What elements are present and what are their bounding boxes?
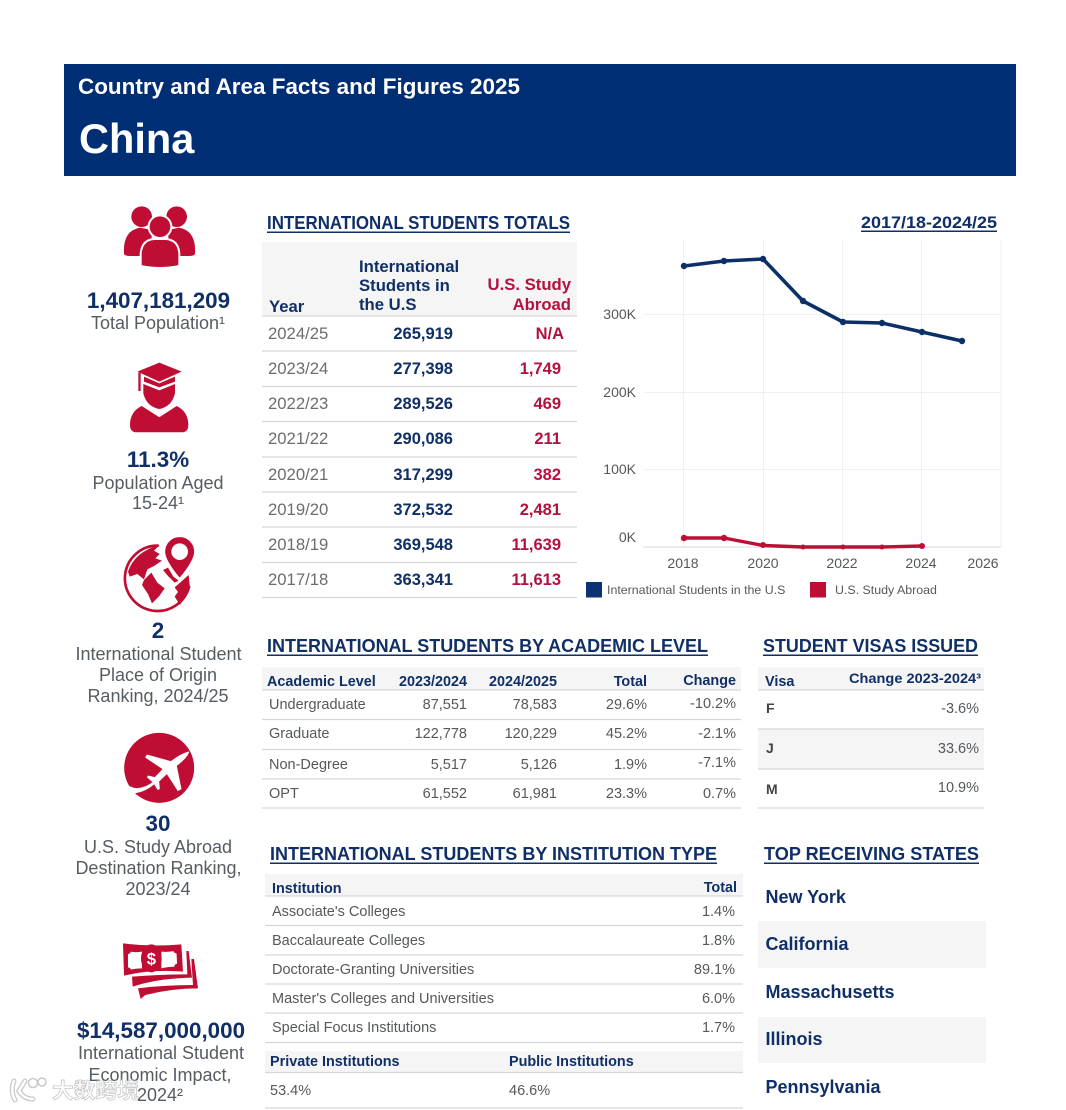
table rows: Special Focus Institutions xyxy=(272,1020,436,1036)
table header: Year xyxy=(269,297,305,316)
panel: key statistics sidebar xyxy=(75,206,245,1105)
state list: Pennsylvania xyxy=(766,1077,882,1097)
stat: study abroad destination ranking: 30 xyxy=(146,811,170,836)
stat: place of origin ranking: 2 xyxy=(152,618,164,643)
table rows: F xyxy=(766,700,775,716)
table rows: 2021/22 xyxy=(268,429,328,448)
table header: Visa xyxy=(765,674,795,690)
table header: Total xyxy=(614,674,647,690)
panel: by academic level table xyxy=(262,636,741,808)
table rows: 45.2% xyxy=(606,726,647,742)
stat: place of origin ranking: Ranking, 2024/25 xyxy=(87,686,229,706)
table header: Change 2023-2024³ xyxy=(849,670,981,686)
table header: 2023/2024 xyxy=(399,674,467,690)
stat: population aged 15-24: 11.3% xyxy=(127,447,189,472)
table rows: -3.6% xyxy=(941,701,979,717)
table rows: 2020/21 xyxy=(268,465,328,484)
state list: Massachusetts xyxy=(766,982,895,1002)
table rows: M xyxy=(766,781,778,797)
y axis labels: 100K xyxy=(603,461,637,477)
private and public split xyxy=(270,1054,634,1099)
table rows: 120,229 xyxy=(505,726,557,742)
state list: Illinois xyxy=(766,1029,823,1049)
table rows: Doctorate-Granting Universities xyxy=(272,962,474,978)
stat: place of origin ranking: Place of Origin xyxy=(99,665,217,685)
table rows: 1.9% xyxy=(614,757,647,773)
stat: study abroad destination ranking xyxy=(75,811,242,899)
state list: New York xyxy=(766,887,847,907)
table rows: 265,919 xyxy=(393,325,453,343)
chart legend: International Students in the U.S xyxy=(607,583,785,597)
table rows xyxy=(766,700,979,797)
table rows: 87,551 xyxy=(423,697,467,713)
table header xyxy=(267,673,736,690)
heading: TOP RECEIVING STATES xyxy=(764,844,979,864)
heading: INTERNATIONAL STUDENTS BY INSTITUTION TYPE xyxy=(270,844,717,864)
x axis labels: 2020 xyxy=(747,555,779,571)
table rows: Graduate xyxy=(269,726,329,742)
table rows: 2023/24 xyxy=(268,359,328,378)
stat: economic impact: Economic Impact, xyxy=(88,1065,232,1085)
panel: trend line chart xyxy=(586,213,1001,598)
table rows: J xyxy=(766,740,774,756)
table rows: 23.3% xyxy=(606,786,647,802)
table rows: 122,778 xyxy=(415,726,467,742)
table rows: 11,613 xyxy=(511,571,561,589)
table rows: 372,532 xyxy=(393,501,453,519)
x axis labels: 2018 xyxy=(667,555,699,571)
line: U.S. study abroad xyxy=(681,535,925,550)
table rows: Undergraduate xyxy=(269,697,366,713)
table rows: 1.7% xyxy=(702,1020,735,1036)
stat: economic impact: 2024² xyxy=(137,1085,183,1105)
stat: population aged 15-24: Population Aged xyxy=(92,473,224,493)
table header xyxy=(272,880,737,897)
stat: study abroad destination ranking: 2023/24 xyxy=(125,879,191,899)
state list: California xyxy=(766,934,850,954)
table rows xyxy=(268,324,564,589)
x axis labels xyxy=(667,555,999,571)
table rows: 6.0% xyxy=(702,991,735,1007)
table header: 2024/2025 xyxy=(489,674,557,690)
heading: STUDENT VISAS ISSUED xyxy=(763,636,978,656)
table rows: 317,299 xyxy=(393,466,453,484)
x axis labels: 2026 xyxy=(967,555,999,571)
table rows: -10.2% xyxy=(690,696,736,712)
stat: total population xyxy=(87,288,230,333)
heading: INTERNATIONAL STUDENTS TOTALS xyxy=(267,213,570,233)
table rows: 289,526 xyxy=(393,395,453,413)
private and public split: Private Institutions xyxy=(270,1054,400,1070)
table rows: 29.6% xyxy=(606,697,647,713)
stat: economic impact: International Student xyxy=(78,1043,244,1063)
table rows: OPT xyxy=(269,786,299,802)
chart date range heading: 2017/18-2024/25 xyxy=(861,213,997,232)
table rows: 5,126 xyxy=(521,757,557,773)
table header xyxy=(765,670,981,690)
table rows: 290,086 xyxy=(393,430,453,448)
table rows: Non-Degree xyxy=(269,757,348,773)
table rows: Associate's Colleges xyxy=(272,904,405,920)
panel: international students totals table xyxy=(262,213,577,598)
icon: people group xyxy=(124,206,195,268)
stat: economic impact: $14,587,000,000 xyxy=(77,1018,245,1043)
y axis labels: 300K xyxy=(603,306,637,322)
table rows: N/A xyxy=(536,325,564,343)
stat: total population: Total Population¹ xyxy=(91,313,225,333)
table rows: 2018/19 xyxy=(268,535,328,554)
table rows: -7.1% xyxy=(698,755,736,771)
private and public split: 53.4% xyxy=(270,1083,311,1099)
table rows: 369,548 xyxy=(393,536,453,554)
table rows: 2017/18 xyxy=(268,570,328,589)
table header: Total xyxy=(704,880,737,896)
table header xyxy=(269,257,572,316)
panel: top receiving states xyxy=(758,844,986,1097)
stat: economic impact xyxy=(77,1018,245,1105)
table rows: 61,552 xyxy=(423,786,467,802)
stat: study abroad destination ranking: U.S. Study Abroad xyxy=(84,837,232,857)
stat: study abroad destination ranking: Destination Ranking, xyxy=(75,858,242,878)
watermark logo xyxy=(12,1078,46,1100)
line: international students xyxy=(681,256,965,344)
table header: Students in xyxy=(359,276,450,295)
table rows: 0.7% xyxy=(703,786,736,802)
table rows: 382 xyxy=(533,466,561,484)
table rows: 89.1% xyxy=(694,962,735,978)
stat: place of origin ranking: International Student xyxy=(75,644,242,664)
table rows: 469 xyxy=(533,395,561,413)
table rows: 2022/23 xyxy=(268,394,328,413)
icon: airplane in circle xyxy=(121,733,194,803)
table rows: 277,398 xyxy=(393,360,453,378)
state list xyxy=(766,887,895,1097)
table header: Academic Level xyxy=(267,674,376,690)
icon: stack of dollar bills xyxy=(123,943,198,999)
y axis labels: 200K xyxy=(603,384,637,400)
table rows xyxy=(269,696,736,802)
table rows: 61,981 xyxy=(513,786,557,802)
table rows: 1,749 xyxy=(520,360,561,378)
x axis labels: 2024 xyxy=(905,555,937,571)
x axis labels: 2022 xyxy=(826,555,858,571)
table header: U.S. Study xyxy=(488,275,572,294)
table rows: 2024/25 xyxy=(268,324,328,343)
icon: stack of dollar bills: $ xyxy=(147,949,157,968)
private and public split: Public Institutions xyxy=(509,1054,634,1070)
table rows: 5,517 xyxy=(431,757,467,773)
chart legend xyxy=(586,582,937,598)
watermark text: 大数跨境 xyxy=(52,1080,139,1103)
table rows: 211 xyxy=(534,430,561,448)
table rows: Master's Colleges and Universities xyxy=(272,991,494,1007)
stat: total population: 1,407,181,209 xyxy=(87,288,230,313)
table rows: 363,341 xyxy=(393,571,453,589)
stat: place of origin ranking xyxy=(75,618,242,706)
chart legend: U.S. Study Abroad xyxy=(835,583,937,597)
table header: International xyxy=(359,257,459,276)
icon: graduate xyxy=(130,363,188,432)
panel: student visas issued table xyxy=(758,636,984,808)
table header: Abroad xyxy=(513,295,571,314)
stat: population aged 15-24 xyxy=(92,447,224,513)
table rows: 10.9% xyxy=(938,780,979,796)
table rows: 2,481 xyxy=(520,501,561,519)
country title: China xyxy=(79,115,195,162)
table rows: 11,639 xyxy=(511,536,561,554)
table header: Change xyxy=(683,673,736,689)
y axis labels xyxy=(603,306,637,545)
table rows: 78,583 xyxy=(513,697,557,713)
table rows: Baccalaureate Colleges xyxy=(272,933,425,949)
table rows: 33.6% xyxy=(938,741,979,757)
table rows: 1.4% xyxy=(702,904,735,920)
panel: by institution type table xyxy=(265,844,743,1108)
table header: the U.S xyxy=(359,295,416,314)
private and public split: 46.6% xyxy=(509,1083,550,1099)
table header: Institution xyxy=(272,881,342,897)
header banner xyxy=(64,64,1016,176)
table rows: 1.8% xyxy=(702,933,735,949)
table rows xyxy=(272,904,735,1036)
y axis labels: 0K xyxy=(619,529,637,545)
icon: globe with map pin xyxy=(125,537,195,611)
heading: INTERNATIONAL STUDENTS BY ACADEMIC LEVEL xyxy=(267,636,708,656)
stat: population aged 15-24: 15-24¹ xyxy=(132,493,184,513)
banner subtitle: Country and Area Facts and Figures 2025 xyxy=(78,74,520,99)
table rows: -2.1% xyxy=(698,726,736,742)
watermark xyxy=(12,1078,139,1103)
table rows: 2019/20 xyxy=(268,500,328,519)
